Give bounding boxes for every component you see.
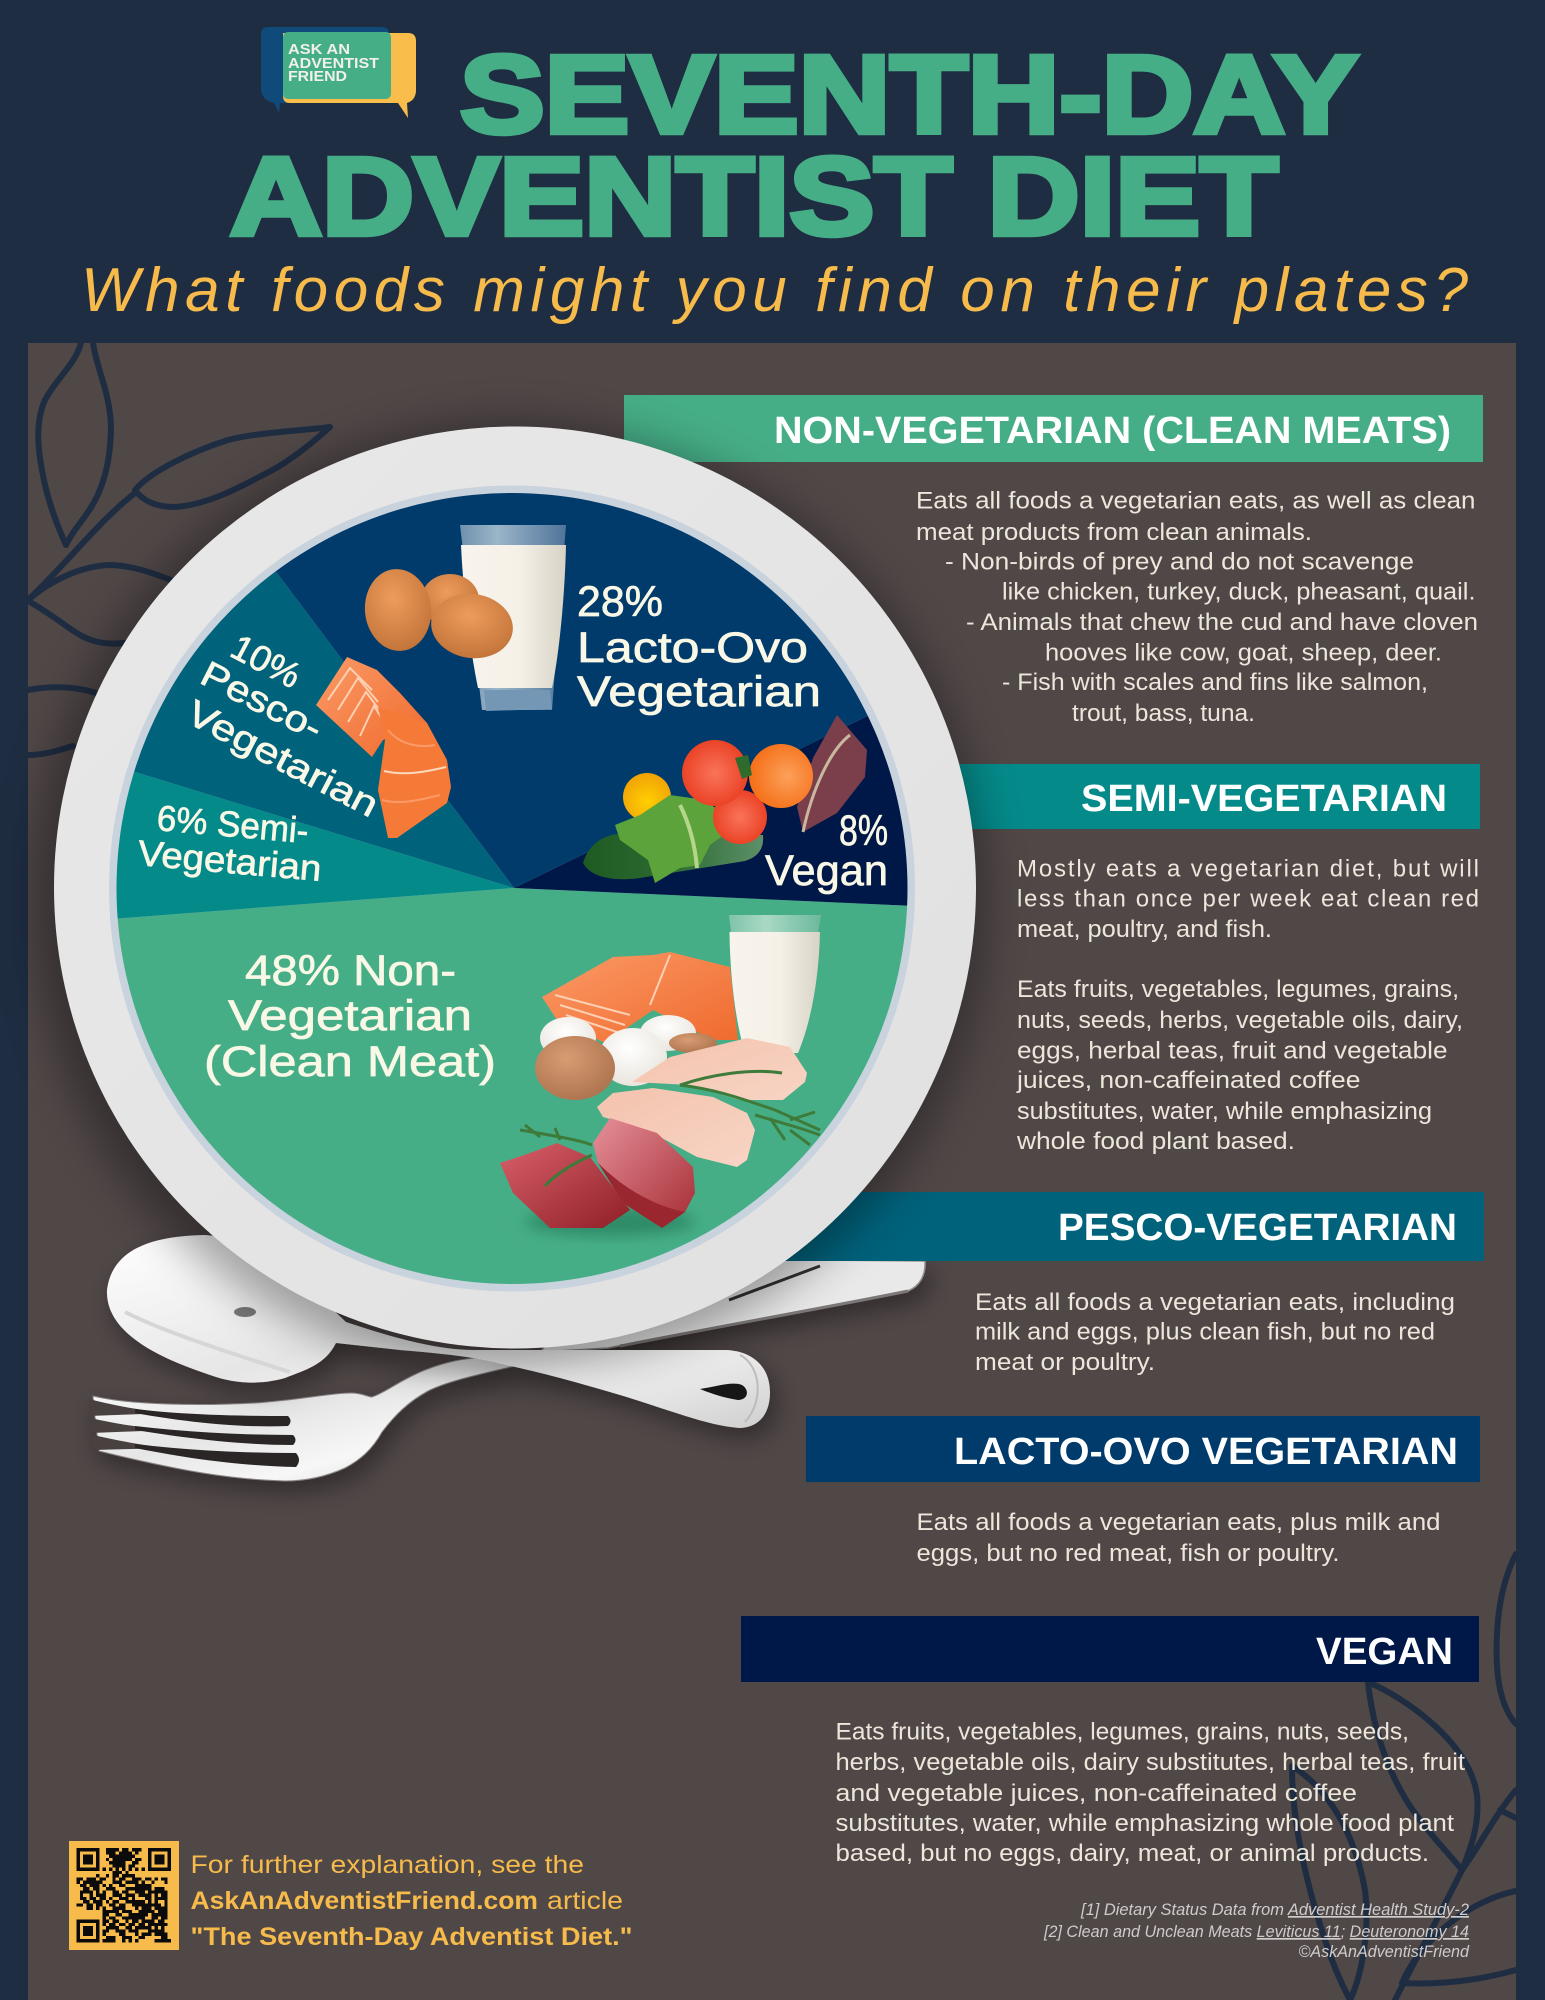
main brown panel — [28, 343, 1516, 2000]
heading: lacto-ovo vegetarian bar — [806, 1416, 1480, 1482]
pie label: 48% non-vegetarian: (Clean Meat) — [204, 1038, 496, 1086]
decorative leaves: bottom right — [1292, 1554, 1516, 2000]
text block: semi-vegetarian description: whole food plant based. — [1016, 1128, 1295, 1155]
text block: non-vegetarian description: meat products from clean animals. — [916, 519, 1312, 546]
heading text: semi-vegetarian: SEMI-VEGETARIAN — [1081, 778, 1447, 820]
text block: non-vegetarian description: - Animals that chew the cud and have cloven — [966, 609, 1478, 636]
heading text: pesco-vegetarian: PESCO-VEGETARIAN — [1058, 1207, 1457, 1249]
slice: vegan 8% — [514, 716, 908, 906]
food: salmon fillets — [316, 657, 451, 838]
title: SEVENTH-DAY — [460, 34, 1358, 156]
slice: semi-vegetarian 6% — [116, 772, 514, 918]
text block: pesco-vegetarian description: Eats all foods a vegetarian eats, including — [975, 1289, 1455, 1316]
cutlery: knife — [540, 1258, 925, 1352]
text block: non-vegetarian description: - Fish with scales and fins like salmon, — [1002, 669, 1428, 696]
text block: pesco-vegetarian description: milk and eggs, plus clean fish, but no red — [975, 1318, 1435, 1346]
pie label: 8% vegan — [765, 807, 888, 895]
heading text: vegan: VEGAN — [1316, 1631, 1453, 1673]
decorative leaves: top left — [28, 343, 330, 755]
slice: lacto-ovo vegetarian 28% — [276, 493, 868, 888]
pie label: 10% pesco-vegetarian: Vegetarian — [180, 692, 386, 825]
QR code — [69, 1841, 179, 1950]
heading text: non-vegetarian: NON-VEGETARIAN (CLEAN MEATS) — [774, 410, 1451, 452]
call to action text — [190, 1851, 632, 1951]
heading: pesco-vegetarian bar — [700, 1192, 1484, 1261]
text block: pesco-vegetarian description: meat or poultry. — [975, 1349, 1155, 1376]
pie label: 28% lacto-ovo vegetarian: Vegetarian — [577, 668, 821, 716]
call to action text: "The Seventh-Day Adventist Diet." — [190, 1923, 632, 1951]
text block: vegan description: Eats fruits, vegetables, legumes, grains, nuts, seeds, — [836, 1718, 1409, 1746]
cutlery: spoon — [107, 1235, 770, 1428]
pie label: 48% non-vegetarian — [204, 947, 496, 1086]
footnotes and sources — [1043, 1900, 1470, 1961]
text block: semi-vegetarian description: less than once per week eat clean red — [1017, 886, 1479, 912]
pie label: 48% non-vegetarian: 48% Non- — [245, 947, 456, 995]
food: glass of milk — [460, 525, 566, 711]
title: ADVENTIST DIET — [230, 136, 1278, 258]
text block: non-vegetarian description: like chicken, turkey, duck, pheasant, quail. — [1002, 578, 1476, 606]
text block: non-vegetarian description: - Non-birds of prey and do not scavenge — [945, 548, 1414, 576]
text block: non-vegetarian description — [916, 488, 1478, 727]
pie rim ring — [109, 486, 915, 1292]
logo: Ask An Adventist Friend speech bubbles — [261, 27, 416, 118]
text block: vegan description: based, but no eggs, dairy, meat, or animal products. — [836, 1840, 1429, 1867]
text block: semi-vegetarian description: nuts, seeds, herbs, vegetable oils, dairy, — [1017, 1007, 1463, 1034]
text block: semi-vegetarian description: substitutes, water, while emphasizing — [1017, 1098, 1432, 1125]
logo: Ask An Adventist Friend speech bubbles: FRIEND — [288, 68, 347, 85]
text block: lacto-ovo vegetarian description — [916, 1509, 1440, 1567]
text block: vegan description: herbs, vegetable oils, dairy substitutes, herbal teas, fruit — [836, 1749, 1465, 1776]
text block: semi-vegetarian description: Mostly eats a vegetarian diet, but will — [1017, 856, 1479, 882]
pie label: 8% vegan: 8% — [839, 807, 888, 855]
pie label: 6% semi-vegetarian — [136, 797, 323, 889]
heading text: lacto-ovo vegetarian: LACTO-OVO VEGETARIAN — [954, 1431, 1458, 1473]
heading: vegan bar — [741, 1616, 1479, 1682]
pie label: 10% pesco-vegetarian: Pesco- — [194, 653, 330, 749]
text block: lacto-ovo vegetarian description: Eats all foods a vegetarian eats, plus milk and — [916, 1509, 1440, 1536]
text block: non-vegetarian description: hooves like cow, goat, sheep, deer. — [1045, 640, 1442, 666]
pie label: 8% vegan: Vegan — [765, 847, 888, 895]
pie label: 10% pesco-vegetarian: 10% — [224, 626, 308, 696]
text block: semi-vegetarian description: Eats fruits, vegetables, legumes, grains, — [1017, 976, 1459, 1003]
footnotes and sources: ©AskAnAdventistFriend — [1298, 1942, 1470, 1961]
footnotes and sources: [2] Clean and Unclean Meats Leviticus 11; Deuteronomy 14 — [1043, 1922, 1469, 1941]
pie label: 48% non-vegetarian: Vegetarian — [228, 992, 472, 1040]
text block: pesco-vegetarian description — [975, 1289, 1455, 1376]
text block: non-vegetarian description: trout, bass, tuna. — [1072, 700, 1255, 727]
text block: vegan description: substitutes, water, while emphasizing whole food plant — [836, 1810, 1454, 1837]
pie label: 6% semi-vegetarian: Vegetarian — [136, 832, 323, 889]
text block: semi-vegetarian description — [1016, 856, 1479, 1155]
plate shadow — [36, 424, 984, 1372]
call to action text: article — [547, 1887, 623, 1915]
heading: semi-vegetarian bar — [900, 764, 1480, 829]
text block: semi-vegetarian description: eggs, herbal teas, fruit and vegetable — [1017, 1038, 1448, 1064]
slice: pesco-vegetarian 10% — [134, 571, 514, 888]
plate rim — [54, 426, 976, 1348]
subtitle: What foods might you find on their plates? — [81, 256, 1469, 325]
footnotes and sources: [1] Dietary Status Data from Adventist Health Study-2 — [1080, 1900, 1470, 1919]
plate: pie chart of dietary status — [54, 426, 976, 1348]
food: plate of clean meats, eggs and milk — [500, 915, 821, 1236]
title — [230, 34, 1358, 258]
logo: Ask An Adventist Friend speech bubbles: ASK AN — [288, 41, 350, 58]
pie label: 28% lacto-ovo vegetarian — [577, 578, 821, 716]
pie label: 10% pesco-vegetarian — [180, 626, 386, 825]
cutlery: fork — [89, 1358, 515, 1481]
food: vegetables — [583, 715, 867, 883]
heading: non-vegetarian bar — [624, 395, 1483, 462]
text block: semi-vegetarian description: meat, poultry, and fish. — [1017, 916, 1272, 943]
pie label: 6% semi-vegetarian: 6% Semi- — [155, 797, 310, 851]
text block: semi-vegetarian description: juices, non-caffeinated coffee — [1016, 1067, 1360, 1094]
pie slices — [116, 493, 908, 1284]
text block: lacto-ovo vegetarian description: eggs, but no red meat, fish or poultry. — [916, 1540, 1340, 1567]
text block: non-vegetarian description: Eats all foods a vegetarian eats, as well as clean — [916, 488, 1476, 514]
call to action text: For further explanation, see the — [190, 1851, 584, 1879]
pie label: 28% lacto-ovo vegetarian: 28% — [577, 578, 663, 626]
text block: vegan description — [836, 1718, 1465, 1867]
logo: Ask An Adventist Friend speech bubbles: ADVENTIST — [288, 55, 379, 72]
food: three brown eggs — [361, 566, 517, 663]
slice: non-vegetarian 48% — [118, 888, 908, 1284]
pie label: 28% lacto-ovo vegetarian: Lacto-Ovo — [577, 624, 808, 672]
text block: vegan description: and vegetable juices, non-caffeinated coffee — [836, 1780, 1357, 1807]
call to action text: AskAnAdventistFriend.com — [190, 1887, 538, 1915]
